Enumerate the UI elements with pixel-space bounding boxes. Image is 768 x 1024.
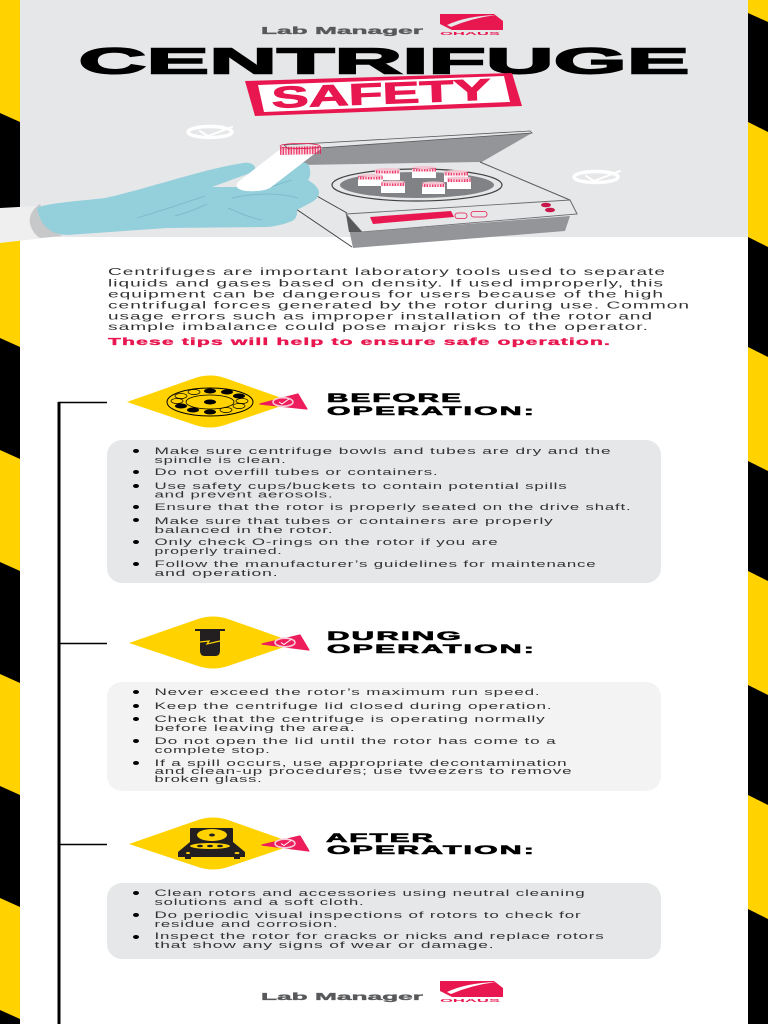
footer logo: Lab Manager: Lab Manager	[261, 991, 423, 1003]
logo: Lab Manager: Lab Manager	[261, 25, 423, 37]
centrifuge rotor	[332, 169, 502, 201]
icon: check right	[574, 171, 620, 182]
safety tag	[260, 394, 307, 409]
tube icon	[195, 629, 225, 656]
centrifuge illustration	[284, 131, 577, 248]
panel: after operation: Inspect the rotor for cracks or nicks and replace rotors	[154, 931, 605, 941]
sample tube in hand	[237, 144, 322, 191]
rotor icon	[167, 388, 253, 416]
panel: after operation: Do periodic visual inspections of rotors to check for	[154, 910, 582, 920]
panel: before operation	[107, 440, 661, 583]
panel: during operation: If a spill occurs, use appropriate decontamination	[154, 758, 568, 768]
centrifuge body	[296, 162, 577, 248]
panel: during operation	[107, 682, 661, 791]
title: CENTRIFUGE	[78, 40, 690, 82]
panel: before operation: and prevent aerosols.	[154, 490, 334, 500]
centrifuge display	[370, 211, 454, 224]
safety tag	[262, 635, 309, 650]
panel: before operation: and operation.	[154, 568, 278, 578]
timeline connector	[58, 402, 107, 1024]
panel: during operation: broken glass.	[154, 774, 262, 784]
footer logo: Ohaus: OHAUS	[440, 998, 503, 1004]
intro text	[108, 267, 690, 333]
centrifuge keys	[455, 212, 487, 218]
heading: after operation: OPERATION:	[327, 843, 536, 857]
centrifuge lid	[284, 131, 532, 175]
panel: during operation: before leaving the area.	[154, 723, 356, 733]
panel: before operation: balanced in the rotor.	[154, 525, 334, 535]
intro text: sample imbalance could pose major risks to the operator.	[108, 322, 649, 333]
panel: after operation: residue and corrosion.	[154, 919, 338, 929]
panel: during operation: Keep the centrifuge lid closed during operation.	[154, 701, 552, 711]
heading: during operation	[327, 629, 536, 656]
icon: centrifuge badge	[129, 818, 309, 870]
panel: after operation: solutions and a soft cloth.	[154, 897, 364, 907]
panel: after operation: that show any signs of wear or damage.	[154, 940, 494, 950]
safety tag	[262, 836, 309, 851]
panel: during operation: Check that the centrifuge is operating normally	[154, 714, 546, 724]
logo: Ohaus	[440, 14, 503, 37]
logo: Ohaus: OHAUS	[440, 31, 503, 37]
footer logo: Ohaus	[440, 981, 503, 1004]
heading: before operation: BEFORE	[327, 391, 463, 405]
left hazard stripe	[0, 0, 20, 1024]
panel: before operation: Only check O-rings on the rotor if you are	[154, 537, 498, 547]
centrifuge icon	[178, 828, 245, 859]
right hazard stripe	[748, 0, 768, 1024]
stamp: safety: SAFETY	[271, 74, 491, 115]
heading: after operation: AFTER	[326, 831, 435, 845]
panel: after operation	[107, 883, 661, 959]
panel: during operation: Never exceed the rotor’s maximum run speed.	[154, 687, 540, 697]
panel: after operation: Clean rotors and accessories using neutral cleaning	[154, 888, 586, 898]
panel: before operation: properly trained.	[154, 546, 282, 556]
gloved hand	[37, 163, 319, 235]
sleeve	[0, 206, 55, 243]
panel: before operation: Use safety cups/buckets to contain potential spills	[154, 481, 568, 491]
icon: check left	[188, 126, 232, 138]
heading: before operation: OPERATION:	[327, 404, 536, 418]
stamp: safety	[245, 73, 522, 116]
panel: before operation: spindle is clean.	[154, 455, 286, 465]
panel: before operation: Ensure that the rotor is properly seated on the drive shaft.	[154, 502, 632, 512]
intro text: liquids and gases based on density. If used improperly, this	[108, 278, 664, 290]
centrifuge buttons	[541, 203, 555, 212]
intro text: equipment can be dangerous for users because of the high	[108, 290, 664, 300]
panel: before operation: Do not overfill tubes or containers.	[154, 467, 438, 477]
intro text: Centrifuges are important laboratory tools used to separate	[108, 267, 666, 278]
intro text: usage errors such as improper installation of the rotor and	[108, 312, 653, 322]
icon: rotor badge	[127, 376, 307, 428]
panel: before operation: Follow the manufacturer’s guidelines for maintenance	[154, 559, 596, 569]
panel: during operation: complete stop.	[154, 745, 270, 755]
panel: before operation: Make sure that tubes or containers are properly	[154, 516, 554, 526]
intro text: centrifugal forces generated by the rotor during use. Common	[108, 300, 690, 312]
cuff	[30, 204, 62, 238]
icon: tube badge	[129, 616, 309, 668]
intro callout: These tips will help to ensure safe operation.	[108, 337, 611, 348]
panel: during operation: Do not open the lid until the rotor has come to a	[154, 736, 556, 746]
heading: before operation	[327, 391, 536, 418]
heading: after operation	[326, 831, 536, 857]
heading: during operation: OPERATION:	[327, 642, 536, 656]
sample tubes	[358, 166, 471, 194]
panel: before operation: Make sure centrifuge bowls and tubes are dry and the	[154, 446, 612, 456]
heading: during operation: DURING	[327, 629, 463, 643]
panel: during operation: and clean-up procedures; use tweezers to remove	[154, 766, 572, 776]
header background	[20, 0, 748, 237]
